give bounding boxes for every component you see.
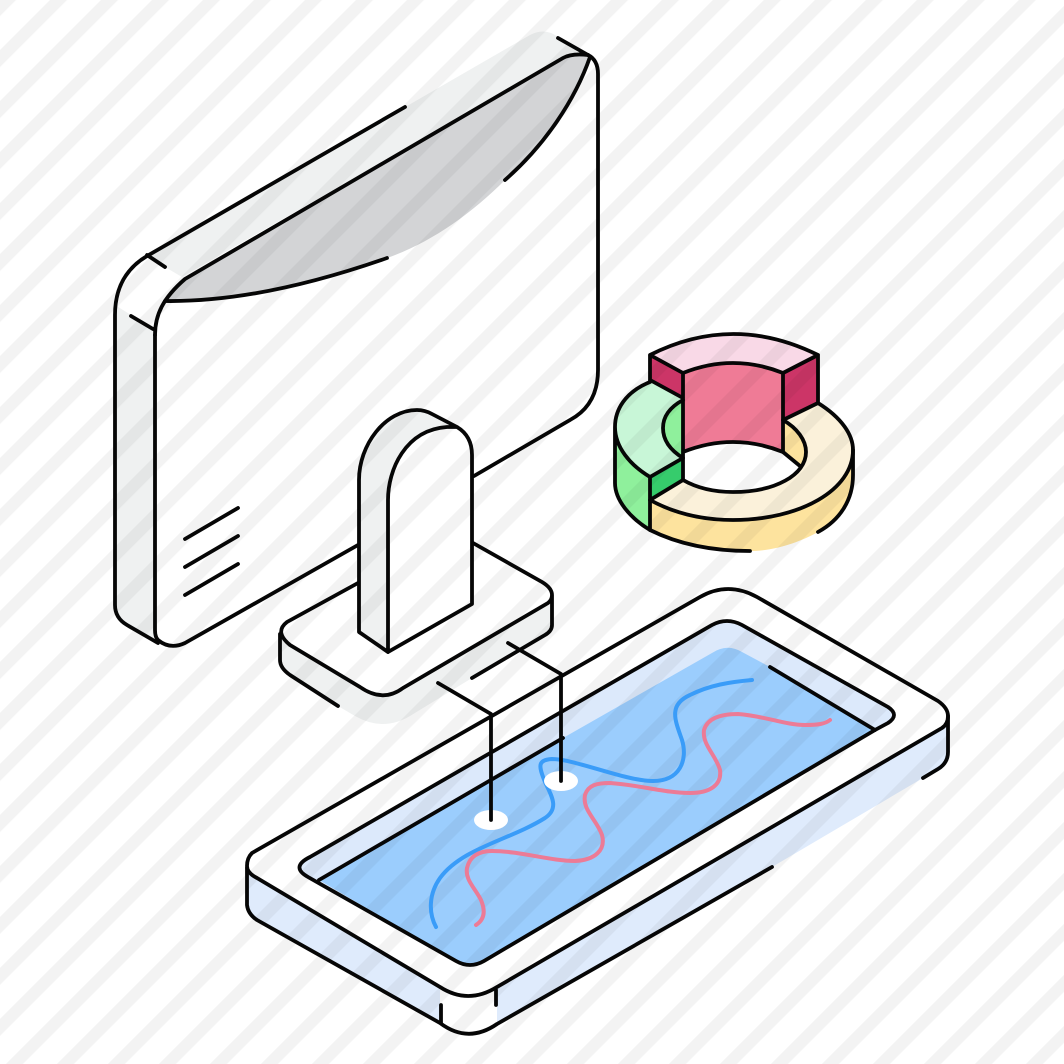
- monitor corner ticks: [131, 255, 165, 329]
- monitor glare curve: [165, 57, 590, 301]
- yellow side outline: [650, 450, 853, 551]
- screen light band: [299, 621, 894, 965]
- donut pink wall: [683, 363, 783, 452]
- donut green top: [615, 382, 683, 477]
- tablet side edge: [247, 716, 948, 1034]
- monitor left side: [115, 305, 160, 644]
- blue line chart curve: [431, 680, 752, 927]
- pin connector lines: [438, 643, 561, 820]
- monitor curved dark glare: [165, 54, 590, 301]
- tablet outlines: [247, 589, 948, 1034]
- monitor screen border: [155, 55, 598, 646]
- pin two: [544, 771, 578, 791]
- pin one: [474, 810, 508, 830]
- yellow segment outline: [650, 403, 853, 520]
- red line chart curve: [467, 714, 830, 925]
- colour fills: monitor shading: [115, 31, 590, 724]
- donut pink top: [650, 334, 818, 373]
- base outlines: [280, 543, 552, 706]
- data point pins: [438, 643, 578, 830]
- donut outlines: [615, 334, 853, 551]
- red segment outline: [650, 334, 818, 480]
- tablet screen border: [299, 621, 894, 965]
- tablet left side: [247, 866, 440, 1023]
- stand side: [359, 410, 457, 652]
- tablet corner ticks: [441, 990, 496, 1023]
- donut dark green side: [650, 459, 683, 500]
- monitor vents: [185, 508, 238, 595]
- monitor top edge: [147, 38, 588, 256]
- monitor top band: [147, 31, 590, 277]
- monitor left side edge: [115, 256, 158, 643]
- monitor top inner edge: [155, 54, 588, 335]
- colour fills: donut chart: [615, 334, 853, 551]
- monitor outlines: [115, 38, 598, 646]
- tablet top face edge: [247, 589, 948, 996]
- base side and shadow: [280, 595, 552, 724]
- tablet right side: [497, 716, 948, 1024]
- donut cream top: [650, 403, 853, 520]
- colour fills: tablet: [247, 621, 948, 1024]
- stand outlines: [359, 410, 472, 652]
- tablet inner screen lines: [319, 667, 875, 880]
- donut green walls: [615, 400, 683, 530]
- screen blue area: [319, 648, 875, 965]
- green segment outline: [615, 382, 683, 530]
- donut red sides: [650, 355, 818, 420]
- donut yellow wall and side: [650, 420, 853, 551]
